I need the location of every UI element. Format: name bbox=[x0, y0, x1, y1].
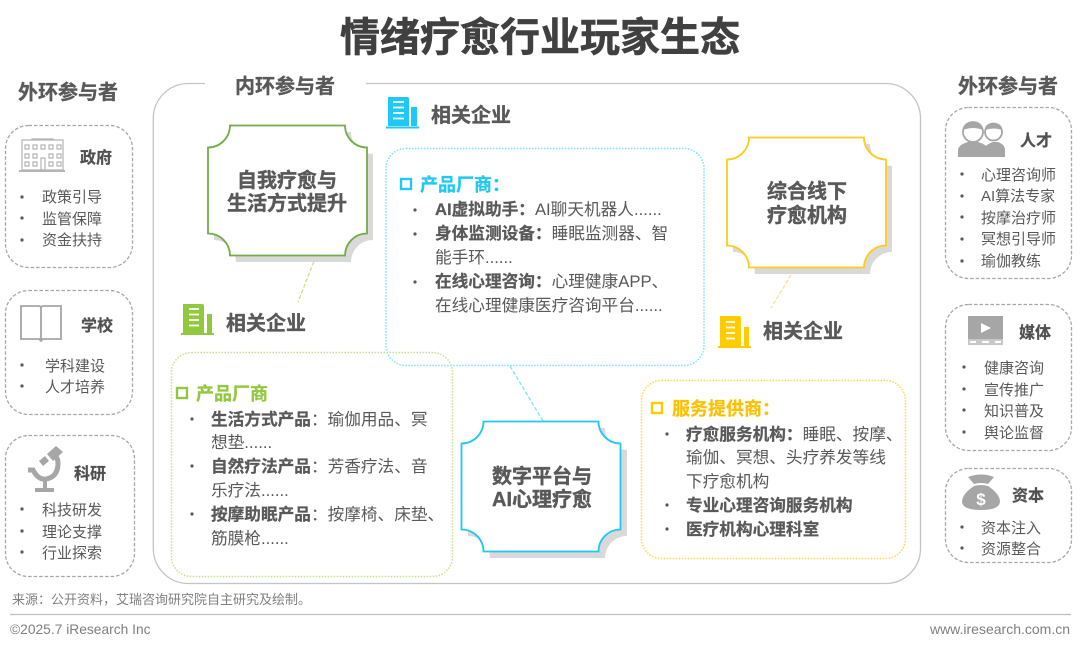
icon: microscope bbox=[28, 446, 63, 492]
label: self healing: 自我疗愈与 bbox=[237, 170, 337, 192]
label: digital platform: AI心理疗愈 bbox=[492, 487, 592, 511]
list: talent: 按摩治疗师 bbox=[981, 209, 1056, 227]
heading: services: 服务提供商： bbox=[672, 398, 780, 419]
list: services bbox=[665, 424, 903, 539]
bullet square bbox=[401, 179, 411, 189]
list: school: 学科建设 bbox=[45, 358, 105, 375]
card: self healing bbox=[208, 126, 373, 262]
bullet square bbox=[652, 403, 662, 413]
heading: capital: 资本 bbox=[1012, 487, 1044, 505]
panel: school bbox=[6, 290, 132, 414]
list: green vendors: 生活方式产品：瑜伽用品、冥 bbox=[211, 409, 428, 429]
list: services: 专业心理咨询服务机构 bbox=[686, 496, 853, 515]
list: talent: 心理咨询师 bbox=[981, 167, 1056, 184]
icon: video player bbox=[968, 316, 1003, 345]
heading: media: 媒体 bbox=[1019, 324, 1051, 342]
heading: research: 科研 bbox=[74, 465, 106, 483]
left heading: outer participants: 外环参与者 bbox=[18, 80, 118, 104]
list: media bbox=[962, 360, 1044, 442]
list: vendors: 能手环...... bbox=[435, 248, 513, 267]
icon: blue building bbox=[386, 97, 419, 128]
list: talent: 瑜伽教练 bbox=[981, 253, 1041, 270]
right heading: outer participants: 外环参与者 bbox=[958, 74, 1058, 98]
heading: vendors: 产品厂商： bbox=[420, 175, 510, 195]
icon: open book bbox=[21, 306, 61, 341]
icon: money bag: $ bbox=[976, 490, 986, 509]
list: government: 监管保障 bbox=[42, 210, 102, 228]
list: green vendors bbox=[190, 409, 444, 548]
panel: green vendors bbox=[172, 352, 452, 576]
list: green vendors: 想垫...... bbox=[211, 433, 272, 452]
heading: green vendors: 产品厂商 bbox=[196, 384, 268, 404]
panel: government bbox=[6, 126, 132, 268]
list: capital: 资本注入 bbox=[981, 520, 1041, 537]
list: research: 理论支撑 bbox=[42, 524, 102, 541]
icon: two people bbox=[958, 122, 1005, 157]
list: services: 下疗愈机构 bbox=[686, 472, 769, 491]
label: offline institutions: 疗愈机构 bbox=[767, 203, 847, 227]
list: vendors bbox=[413, 199, 668, 315]
list: vendors: 在线心理健康医疗咨询平台...... bbox=[435, 296, 663, 315]
list: research bbox=[20, 502, 102, 562]
list: government: 资金扶持 bbox=[42, 232, 102, 249]
list: vendors: AI虚拟助手：AI聊天机器人...... bbox=[435, 199, 662, 219]
list: talent bbox=[960, 167, 1056, 270]
list: talent: 冥想引导师 bbox=[981, 231, 1056, 248]
connector: green bbox=[298, 256, 316, 302]
panel: yellow services bbox=[642, 380, 906, 558]
title: 情绪疗愈行业玩家生态 bbox=[340, 16, 740, 60]
card: digital platform bbox=[462, 422, 627, 558]
list: services: 疗愈服务机构：睡眠、按摩、 bbox=[686, 424, 903, 444]
connector: yellow bbox=[771, 275, 791, 308]
panel: talent bbox=[946, 108, 1072, 278]
panel: media bbox=[946, 304, 1072, 450]
heading: inner participants: 内环参与者 bbox=[235, 74, 335, 98]
list: services: 瑜伽、冥想、头疗养发等线 bbox=[686, 448, 886, 467]
heading: blue related companies: 相关企业 bbox=[431, 103, 511, 127]
panel: research bbox=[6, 436, 134, 576]
heading: government: 政府 bbox=[80, 148, 112, 167]
list: government: 政策引导 bbox=[42, 189, 102, 206]
panel: capital bbox=[946, 468, 1072, 562]
list: vendors: 身体监测设备：睡眠监测器、智 bbox=[435, 223, 668, 243]
list: school bbox=[20, 358, 105, 396]
label: digital platform: 数字平台与 bbox=[492, 466, 592, 488]
copyright: ©2025.7 iResearch Inc bbox=[10, 622, 151, 637]
source note: 来源：公开资料，艾瑞咨询研究院自主研究及绘制。 bbox=[12, 592, 311, 607]
list: vendors: 在线心理咨询：心理健康APP、 bbox=[435, 272, 668, 291]
panel: digital platform vendors bbox=[386, 148, 704, 366]
heading: yellow related companies: 相关企业 bbox=[763, 319, 843, 343]
label: offline institutions: 综合线下 bbox=[767, 181, 847, 203]
list: government bbox=[20, 189, 102, 249]
list: media: 宣传推广 bbox=[984, 382, 1044, 399]
icon: government building bbox=[19, 139, 65, 171]
list: capital: 资源整合 bbox=[981, 541, 1041, 558]
icon: yellow building bbox=[718, 316, 751, 348]
list: green vendors: 按摩助眠产品：按摩椅、床垫、 bbox=[211, 504, 444, 524]
heading: green related companies: 相关企业 bbox=[226, 311, 306, 335]
list: capital bbox=[960, 520, 1041, 558]
list: media: 舆论监督 bbox=[984, 425, 1044, 442]
heading: talent: 人才 bbox=[1020, 131, 1052, 150]
list: research: 科技研发 bbox=[42, 502, 102, 519]
label: self healing: 生活方式提升 bbox=[227, 191, 347, 215]
list: green vendors: 乐疗法...... bbox=[211, 481, 289, 500]
list: media: 健康咨询 bbox=[984, 360, 1044, 377]
list: talent: AI算法专家 bbox=[981, 187, 1055, 205]
list: school: 人才培养 bbox=[45, 379, 105, 396]
list: green vendors: 筋膜枪...... bbox=[211, 529, 289, 548]
connector: blue bbox=[510, 366, 543, 421]
list: research: 行业探索 bbox=[42, 545, 102, 562]
card: offline institutions bbox=[727, 138, 892, 274]
icon: green building bbox=[181, 304, 214, 335]
heading: school: 学校 bbox=[81, 316, 113, 335]
website: www.iresearch.com.cn bbox=[929, 621, 1070, 637]
bullet square bbox=[177, 388, 187, 398]
list: green vendors: 自然疗法产品：芳香疗法、音 bbox=[211, 456, 428, 476]
list: media: 知识普及 bbox=[984, 403, 1044, 420]
list: services: 医疗机构心理科室 bbox=[686, 519, 819, 539]
